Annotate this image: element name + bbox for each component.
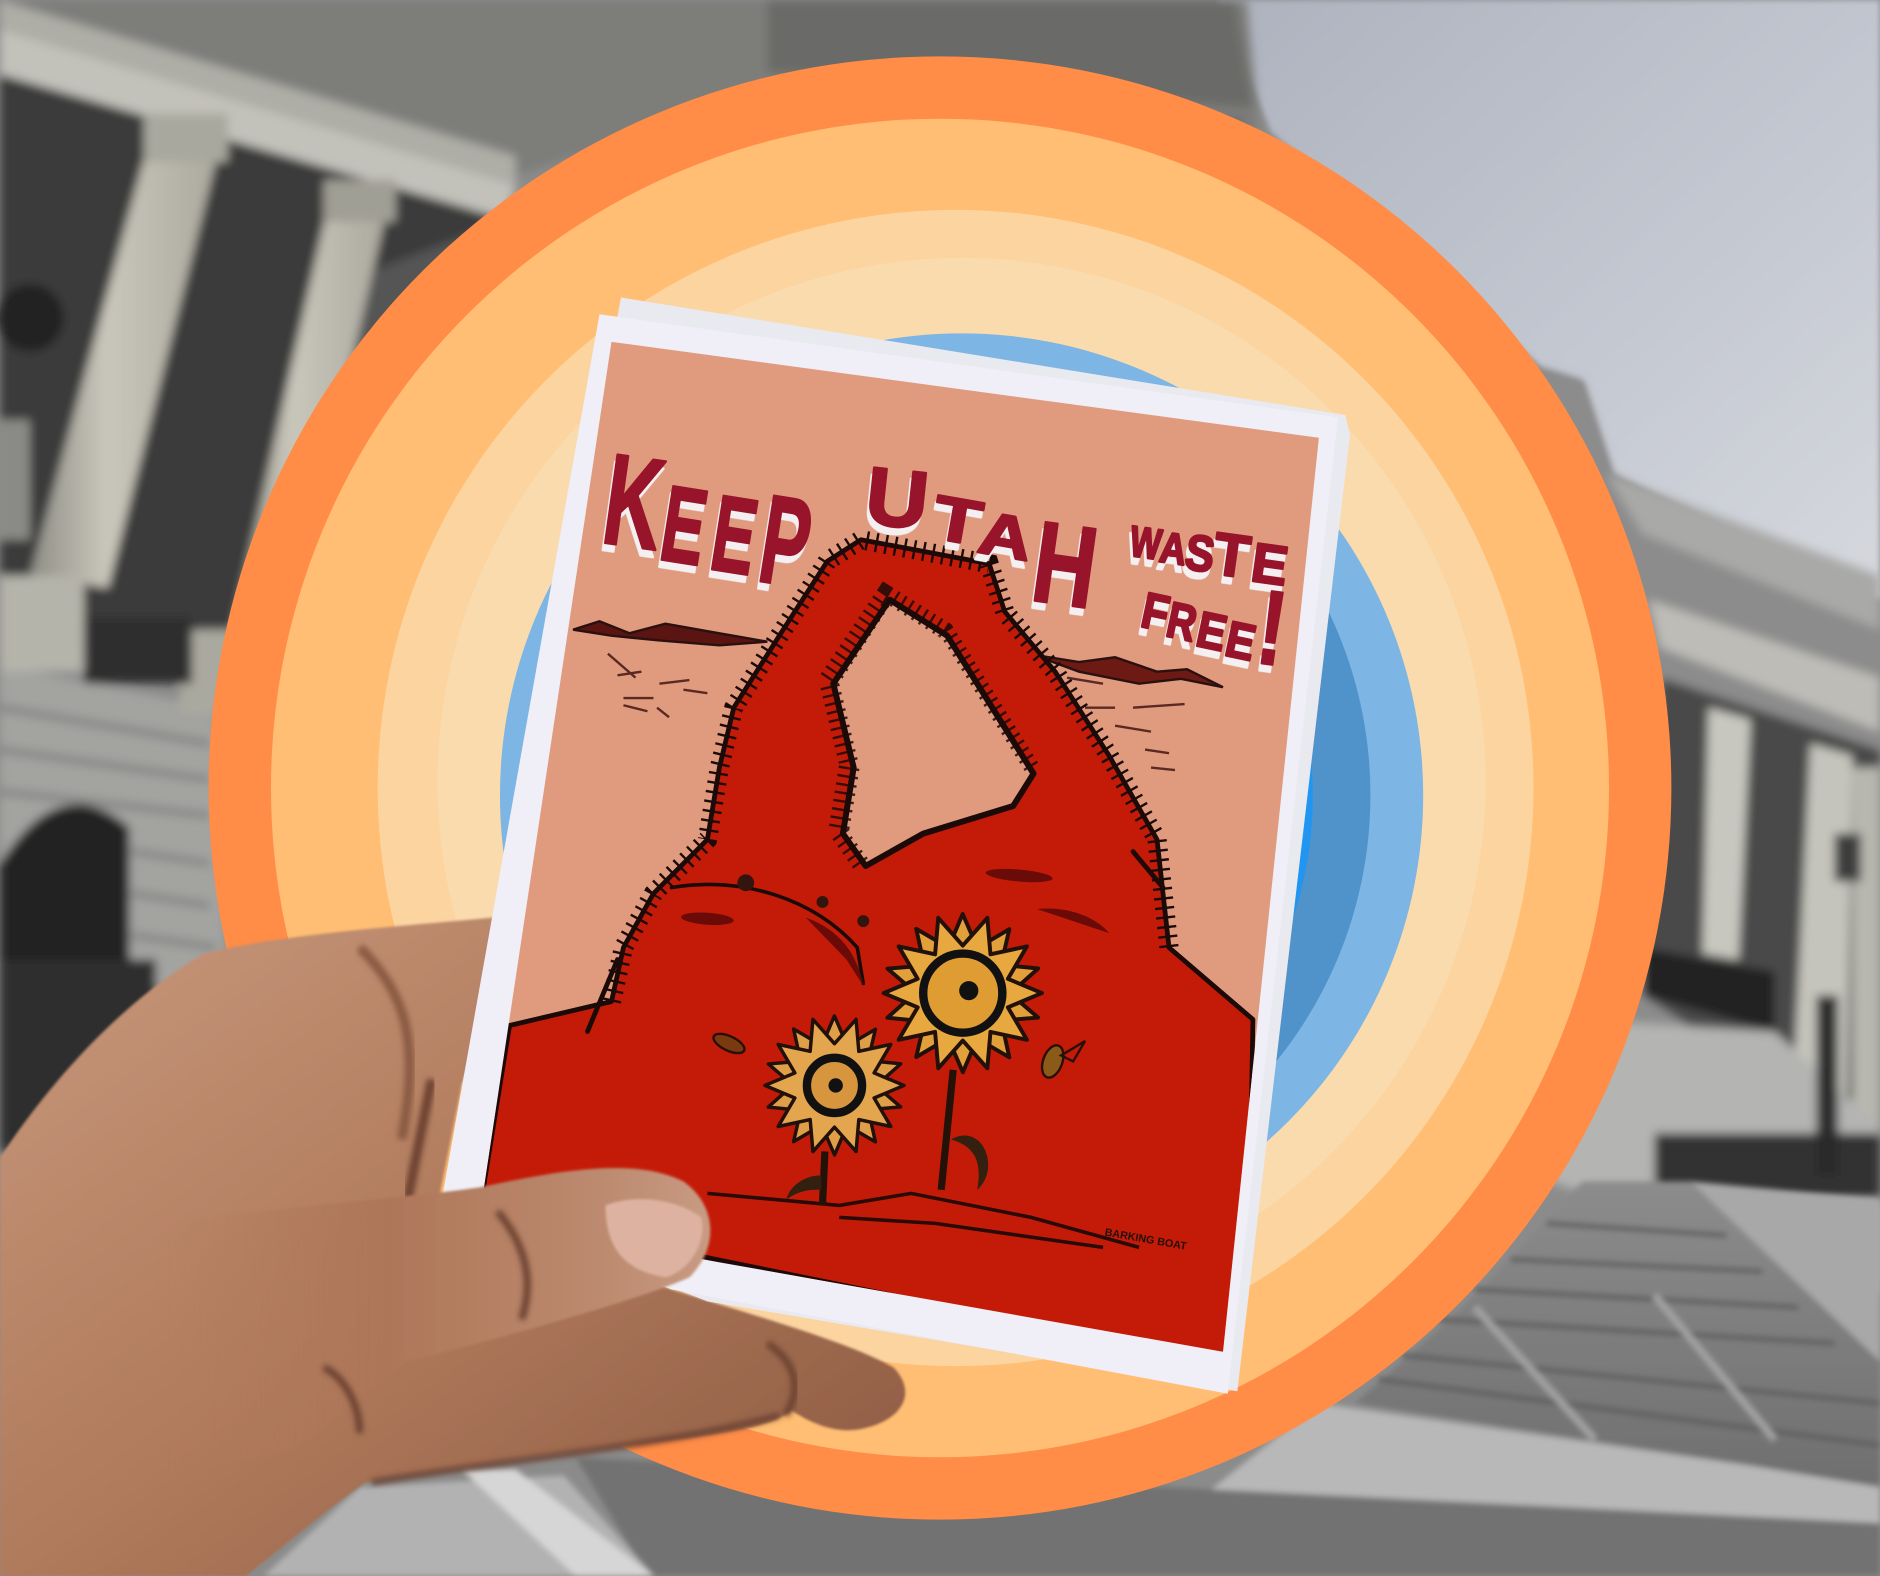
distant mesas (573, 621, 1223, 770)
slogan lettering: E (653, 462, 715, 588)
slogan lettering: S (1182, 523, 1218, 583)
window fuzzy edge hatching (830, 596, 1030, 862)
thumb holding card (168, 1168, 710, 1475)
slogan lettering: T (928, 483, 987, 559)
right wing (1319, 369, 1880, 1295)
slogan lettering: H (1025, 498, 1105, 633)
arch fuzzy edge hatching (611, 540, 1169, 1001)
concentric sun circles (209, 56, 1671, 1520)
slogan lettering: E (1192, 600, 1232, 662)
hand behind card (0, 918, 905, 1576)
rock crevices (681, 867, 1109, 986)
slogan lettering: E (1221, 610, 1261, 672)
arch window (833, 600, 1034, 866)
slogan lettering: U (861, 450, 933, 547)
slogan lettering: K (596, 427, 673, 578)
thumbnail (605, 1199, 703, 1277)
slogan lettering: ! (1251, 568, 1293, 689)
slogan lettering: P (751, 468, 821, 615)
left portico (0, 0, 1259, 1151)
slogan lettering: R (1162, 591, 1202, 652)
card artwork (456, 324, 1343, 1379)
slogan lettering: W (1127, 518, 1165, 570)
postcard stack (441, 297, 1350, 1394)
window fill restore (839, 606, 1026, 859)
slogan lettering: A (974, 499, 1037, 574)
sky (1217, 0, 1880, 600)
slogan lettering: E (704, 472, 765, 598)
steps (264, 1181, 1880, 1576)
slogan lettering: F (1137, 581, 1174, 642)
card stack edges (446, 297, 1350, 1391)
rock contour lines (588, 852, 1163, 1031)
slogan lettering: A (1157, 524, 1190, 575)
large sunflower (882, 912, 1044, 1190)
slogan lettering: T (1209, 520, 1254, 591)
small sunflower (763, 1014, 906, 1206)
knuckle creases (324, 1211, 527, 1433)
slogan lettering: E (1248, 531, 1292, 597)
slogan lettering (602, 453, 1288, 674)
peach sky (456, 324, 1343, 1379)
artist signature: BARKING BOAT (1104, 1227, 1188, 1253)
bees (711, 1030, 1085, 1081)
blue inner circles (500, 333, 1423, 1257)
white card (441, 314, 1338, 1394)
red rock arch (480, 540, 1253, 1367)
ground cracks (707, 1193, 1139, 1247)
